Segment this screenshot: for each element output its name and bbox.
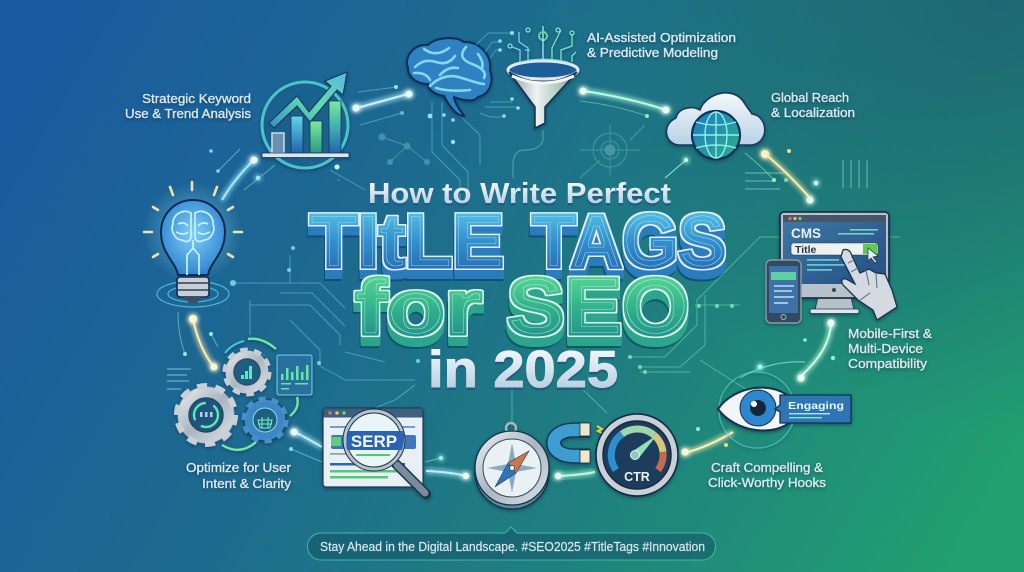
icon: CTR gauge xyxy=(596,414,678,496)
title line: in 2025: in 2025 xyxy=(428,341,618,399)
label: global reach: & Localization xyxy=(771,106,855,120)
title line: Title Tags xyxy=(310,199,726,283)
label: mobile first: Mobile-First & xyxy=(848,327,933,341)
label: user intent xyxy=(186,461,292,491)
label: AI optimization: AI-Assisted Optimization xyxy=(587,31,736,45)
icon: desktop, phone and robotic hand xyxy=(766,212,897,323)
icon: desktop, phone and robotic hand: CMS xyxy=(791,226,821,241)
icon: desktop, phone and robotic hand: Title xyxy=(795,244,817,256)
label: keyword strategy: Strategic Keyword xyxy=(142,92,251,106)
label: global reach: Global Reach xyxy=(771,91,849,105)
label: mobile first xyxy=(848,327,933,371)
label: global reach xyxy=(771,91,855,120)
title line: for SEO: for xyxy=(355,263,482,351)
icon: SERP window with magnifier: SERP xyxy=(351,432,397,451)
title line: for SEO xyxy=(355,262,689,352)
icon: rising trend chart xyxy=(262,72,349,168)
icon: funnel with data streams xyxy=(508,26,578,128)
decorative circuit network xyxy=(167,102,900,427)
glowing connectors xyxy=(178,85,835,479)
label: keyword strategy: Use & Trend Analysis xyxy=(125,107,251,121)
icon: magnet xyxy=(554,423,604,463)
footer pill xyxy=(308,527,716,560)
label: mobile first: Compatibility xyxy=(848,357,928,371)
icon: brain xyxy=(407,38,492,116)
icon: CTR gauge: CTR xyxy=(624,470,650,484)
footer pill: Stay Ahead in the Digital Landscape. #SEO2025 #TitleTags #Innovation xyxy=(320,540,705,554)
icon: eye with Engaging badge: Engaging xyxy=(788,400,844,412)
label: compelling hooks: Craft Compelling & xyxy=(711,461,824,475)
icon: lightbulb with brain xyxy=(143,182,243,307)
label: AI optimization xyxy=(587,31,736,60)
title xyxy=(310,178,726,399)
icon: eye with Engaging badge xyxy=(718,372,851,448)
label: user intent: Optimize for User xyxy=(186,461,291,475)
label: AI optimization: & Predictive Modeling xyxy=(587,46,718,60)
icon: compass xyxy=(475,423,549,509)
title line: How to Write Perfect: How to Write Perfect xyxy=(368,178,671,210)
brain circuit traces xyxy=(428,31,520,144)
label: mobile first: Multi-Device xyxy=(848,342,923,356)
title line: Title Tags: TAGS xyxy=(532,199,726,283)
icon: cloud with globe xyxy=(666,93,765,159)
icon: gears and dashboard xyxy=(177,339,312,450)
label: user intent: Intent & Clarity xyxy=(202,477,292,491)
label: compelling hooks xyxy=(708,461,826,490)
icon: SERP window with magnifier xyxy=(323,408,426,494)
title line: Title Tags: TItLE xyxy=(310,199,504,283)
label: keyword strategy xyxy=(125,92,251,121)
label: compelling hooks: Click-Worthy Hooks xyxy=(708,476,826,490)
title line: for SEO: SEO xyxy=(507,262,689,352)
